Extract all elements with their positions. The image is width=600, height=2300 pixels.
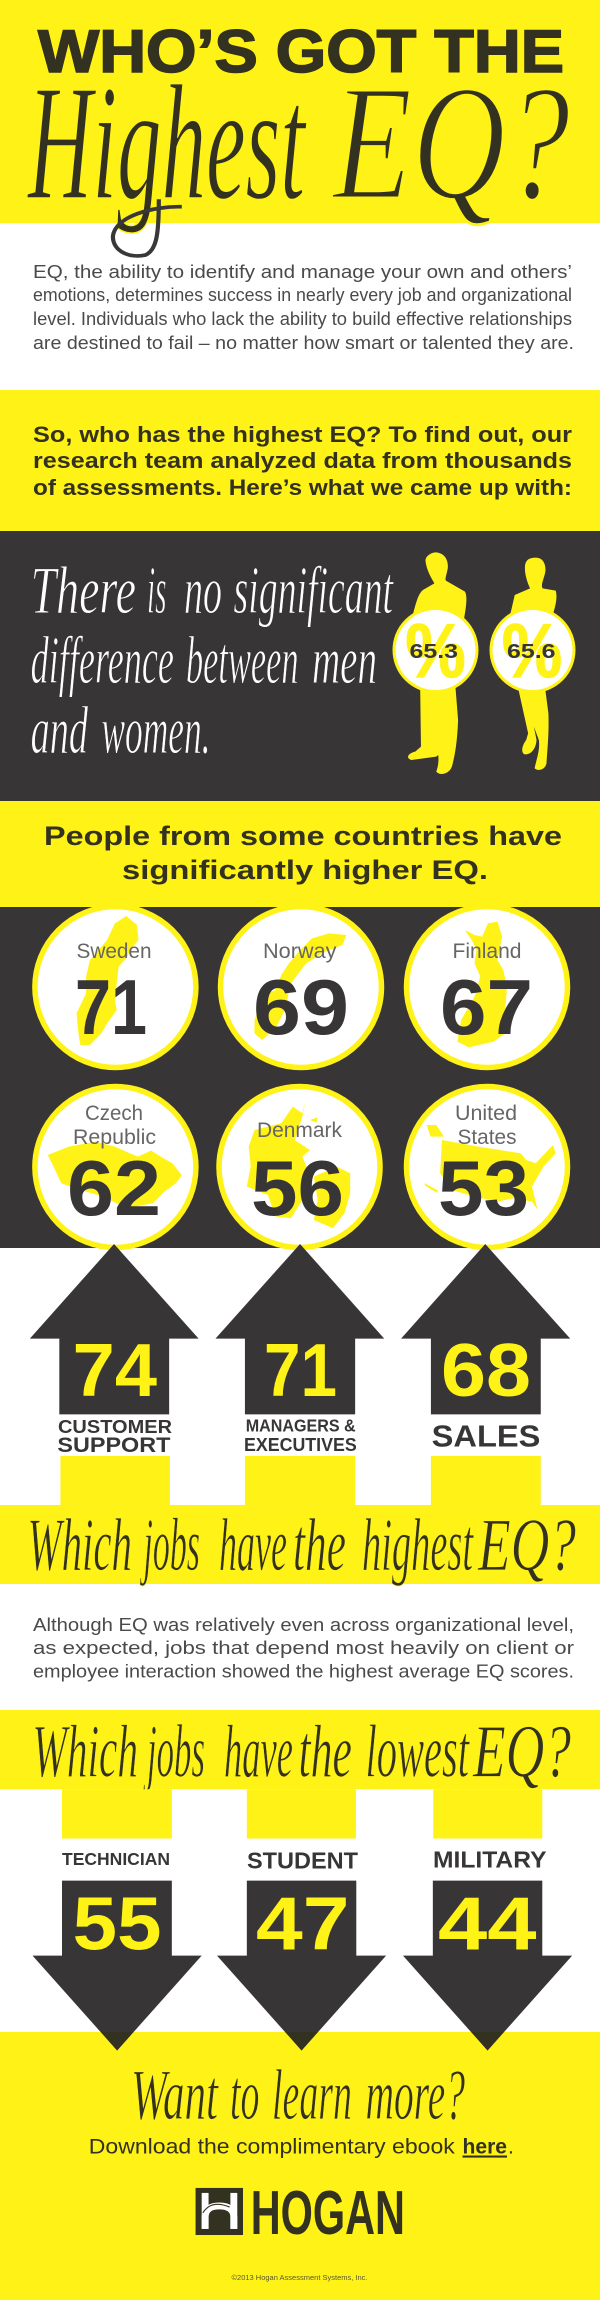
title: Highest — [27, 51, 307, 234]
panel: footer band — [0, 2032, 600, 2300]
intro paragraph: EQ, the ability to identify and manage your own and others’ — [33, 262, 572, 282]
heading: lowest jobs: jobs — [143, 1710, 205, 1794]
country badge: Sweden — [35, 906, 196, 1068]
icon: woman silhouette — [509, 558, 556, 770]
heading: want to learn more — [131, 2055, 465, 2135]
countries heading — [44, 821, 562, 885]
panel: title band — [0, 0, 600, 223]
arrow up: customer support: 74 — [73, 1328, 157, 1412]
country badge: Finland — [406, 906, 568, 1068]
gender statement: men — [312, 622, 377, 698]
country badge: Czech Republic: Czech — [85, 1102, 143, 1125]
gender statement — [31, 552, 394, 768]
heading: highest jobs: have — [219, 1504, 287, 1587]
heading: lowest jobs: Which — [32, 1710, 138, 1794]
heading: want to learn more: more? — [366, 2055, 465, 2135]
gender statement: There — [31, 552, 136, 628]
panel: highest jobs heading band — [0, 1505, 600, 1584]
gender statement: difference — [31, 622, 174, 698]
arrow up: managers and executives: 71 — [264, 1328, 337, 1412]
country badge: Czech Republic — [35, 1086, 196, 1248]
arrow down: military — [403, 1789, 572, 2051]
gender statement: between — [186, 622, 298, 698]
country badge: Norway: Norway — [263, 940, 337, 963]
download call to action: here — [462, 2136, 507, 2158]
research paragraph: So, who has the highest EQ? To find out, our — [33, 422, 572, 447]
arrow up: sales: 68 — [441, 1328, 531, 1412]
panel: countries band — [0, 907, 600, 1248]
research paragraph: of assessments. Here’s what we came up with: — [33, 475, 572, 500]
country badge: Finland: 67 — [440, 963, 533, 1051]
arrow down: technician — [33, 1789, 202, 2051]
arrow down: student: 47 — [256, 1882, 349, 1966]
heading: lowest jobs: have — [224, 1710, 293, 1794]
country badge: Sweden: Sweden — [76, 940, 152, 963]
heading: want to learn more: to — [230, 2055, 260, 2135]
gender statement: is — [147, 552, 166, 628]
gender statement: and — [31, 692, 89, 768]
panel: research question band — [0, 390, 600, 531]
heading: lowest jobs: lowest — [366, 1710, 470, 1794]
panel: gender band — [0, 531, 600, 801]
heading: highest jobs: Which — [28, 1504, 132, 1587]
heading: lowest jobs — [32, 1710, 571, 1794]
logo: Hogan: HOGAN — [251, 2179, 405, 2248]
download call to action: . — [508, 2136, 514, 2158]
arrow up: customer support — [30, 1244, 199, 1505]
arrow down: military: MILITARY — [433, 1847, 546, 1873]
country badge: Finland: Finland — [452, 940, 522, 963]
country badge: Denmark — [219, 1086, 380, 1248]
country badge: United States: States — [458, 1126, 516, 1149]
panel: countries heading band — [0, 801, 600, 907]
intro paragraph: are destined to fail – no matter how smart or talented they are. — [33, 333, 574, 353]
arrow up: sales: SALES — [432, 1419, 540, 1454]
heading: want to learn more: learn — [272, 2055, 352, 2135]
country badge: Denmark: 56 — [251, 1144, 344, 1232]
arrow down: student: STUDENT — [247, 1847, 358, 1873]
arrow up: sales — [401, 1244, 570, 1505]
copyright: ©2013 Hogan Assessment Systems, Inc. — [232, 2274, 368, 2282]
heading: highest jobs — [28, 1504, 576, 1587]
title: WHO’S GOT THE — [38, 18, 564, 85]
logo: Hogan — [196, 2179, 405, 2248]
country badge: Czech Republic: 62 — [67, 1144, 161, 1232]
intro paragraph — [33, 262, 574, 353]
panel: lowest jobs heading band — [0, 1710, 600, 1789]
icon: man silhouette — [408, 552, 466, 774]
country badge: Norway — [220, 906, 382, 1068]
countries heading: People from some countries have — [44, 821, 562, 851]
gender statement: women. — [101, 692, 210, 768]
arrow up: customer support: CUSTOMER — [58, 1416, 173, 1437]
heading: want to learn more: Want — [131, 2055, 219, 2135]
gender statement: significant — [234, 552, 394, 628]
country badge: United States: United — [455, 1102, 517, 1125]
research paragraph: research team analyzed data from thousands — [33, 448, 572, 473]
heading: highest jobs: jobs — [139, 1504, 200, 1587]
men score badge: 65.3 — [410, 641, 458, 663]
jobs paragraph: Although EQ was relatively even across organizational level, — [33, 1615, 574, 1635]
heading: highest jobs: highest — [362, 1504, 474, 1587]
heading: lowest jobs: the — [298, 1710, 352, 1794]
intro paragraph: level. Individuals who lack the ability to build effective relationships — [33, 309, 572, 329]
heading: highest jobs: the — [293, 1504, 346, 1587]
women score badge: % — [502, 609, 562, 694]
jobs paragraph: employee interaction showed the highest average EQ scores. — [33, 1662, 574, 1682]
country badge: Czech Republic: Republic — [73, 1126, 156, 1149]
country badge: Sweden: 71 — [75, 963, 147, 1051]
men score badge: % — [406, 609, 466, 694]
intro paragraph: emotions, determines success in nearly every job and organizational — [33, 285, 572, 305]
jobs paragraph — [33, 1615, 574, 1682]
women score badge: 65.6 — [507, 641, 556, 663]
arrow up: managers and executives: MANAGERS & — [246, 1416, 356, 1436]
arrow up: customer support: SUPPORT — [57, 1434, 171, 1457]
countries heading: significantly higher EQ. — [122, 855, 488, 885]
country badge: United States: 53 — [438, 1144, 529, 1232]
arrow down: student — [217, 1789, 386, 2051]
jobs paragraph: as expected, jobs that depend most heavily on client or — [33, 1638, 574, 1658]
country badge: Norway: 69 — [253, 963, 349, 1051]
country badge: United States — [406, 1086, 568, 1248]
download call to action: Download the complimentary ebook — [89, 2136, 455, 2158]
gender statement: no — [184, 552, 222, 628]
research paragraph — [33, 422, 572, 500]
country badge: Denmark: Denmark — [257, 1119, 342, 1142]
arrow down: technician: TECHNICIAN — [62, 1849, 170, 1869]
arrow up: managers and executives: EXECUTIVES — [244, 1435, 357, 1455]
arrow down: technician: 55 — [73, 1882, 162, 1966]
arrow down: military: 44 — [438, 1882, 537, 1966]
arrow up: managers and executives — [215, 1244, 384, 1505]
